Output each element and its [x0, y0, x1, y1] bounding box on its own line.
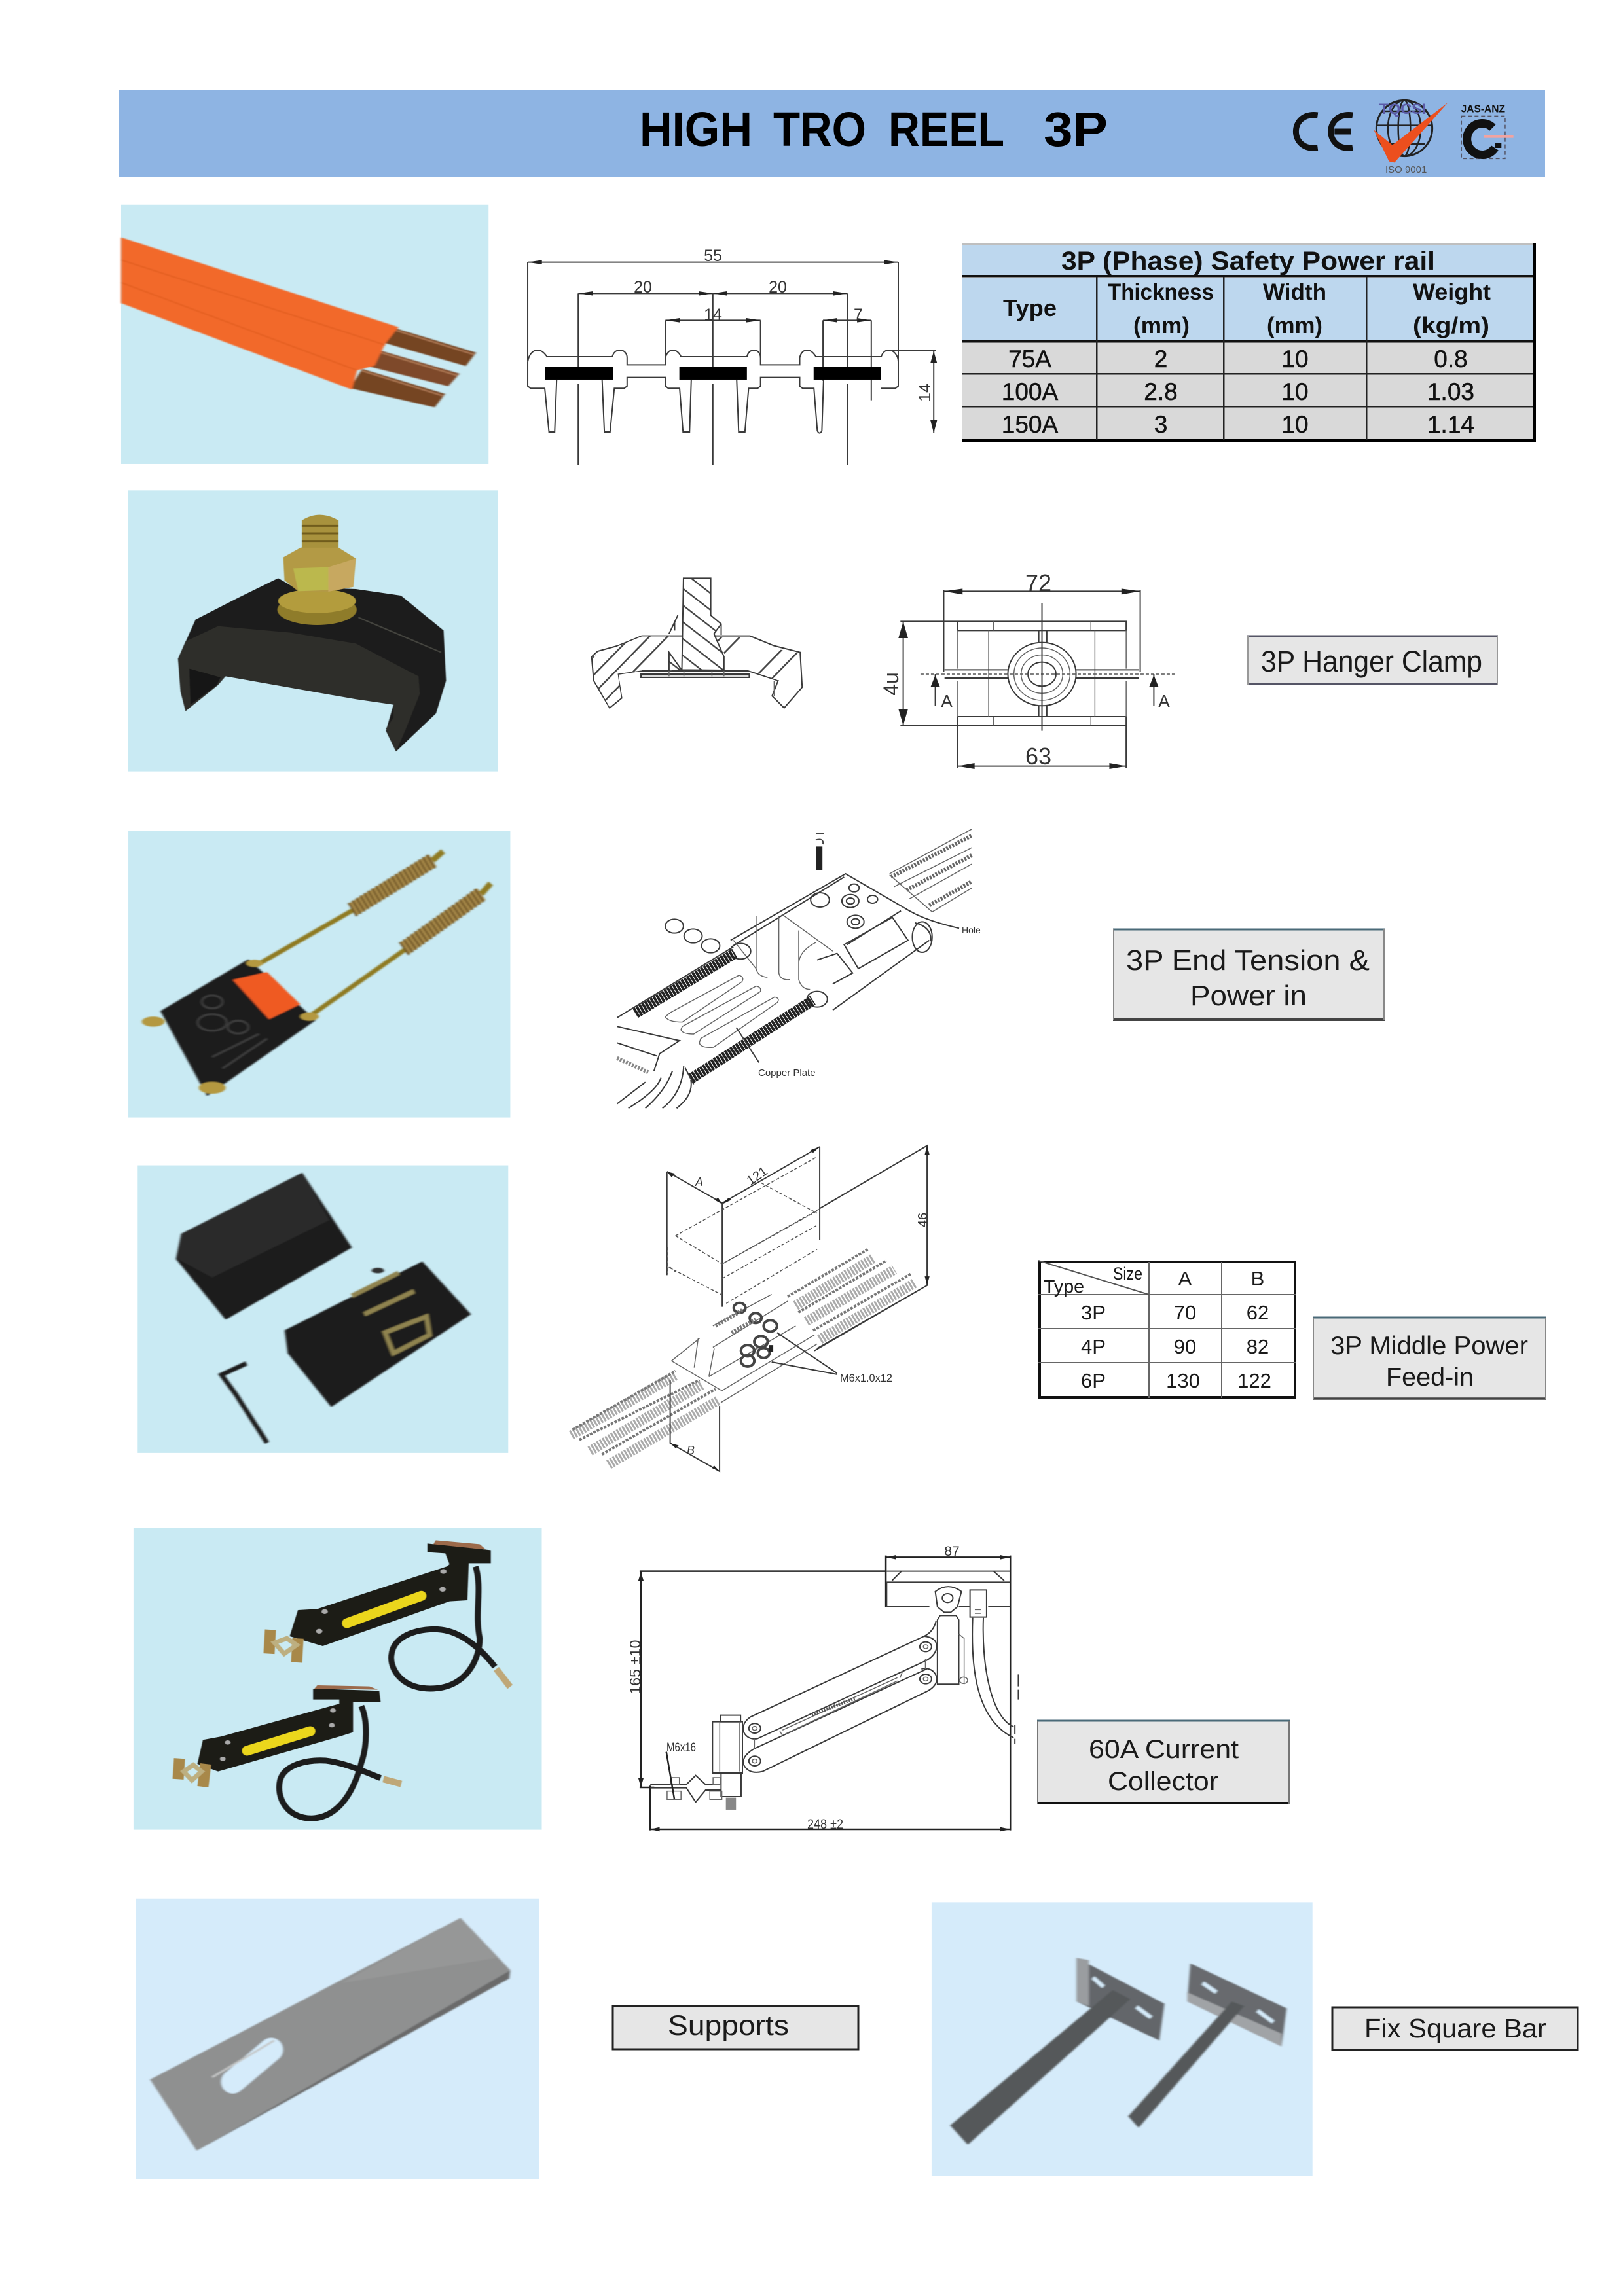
title: HIGH [640, 102, 752, 156]
table: 3P safety power rail: Type [1003, 295, 1057, 321]
panel: middle feed-in photo [137, 1166, 508, 1453]
icon: certification marks: TQCSI [1379, 101, 1426, 117]
diagram: rail cross-section: 14 [704, 306, 722, 324]
upper collector [269, 1540, 510, 1689]
bar two [1187, 1964, 1286, 2047]
body [160, 959, 316, 1096]
slot [233, 2050, 271, 2082]
panel: hanger clamp photo [128, 490, 498, 772]
label: Fix Square Bar: Fix Square Bar [1364, 2013, 1546, 2043]
table: size table: 62 [1247, 1301, 1269, 1324]
table: 3P safety power rail [962, 243, 1536, 442]
label: 3P End Tension & Power in: Power in [1190, 980, 1307, 1012]
table: 3P safety power rail: 10 [1281, 346, 1309, 372]
diagram: rail cross-section: 20 [769, 278, 787, 296]
diagram: hanger clamp plan view: 72 [1025, 569, 1051, 596]
diagram: middle feed-in assembly: A [695, 1175, 703, 1189]
table: 3P safety power rail: 150A [1002, 411, 1059, 438]
table: 3P safety power rail: (kg/m) [1413, 313, 1489, 338]
title: REEL [888, 102, 1004, 156]
bar one [1076, 1958, 1165, 2041]
table: 3P safety power rail: 10 [1281, 378, 1309, 405]
table: size table [1038, 1261, 1296, 1398]
diagram: rail cross-section: 14 [916, 384, 934, 402]
table: 3P safety power rail: 0.8 [1434, 346, 1468, 372]
table: 3P safety power rail: Weight [1413, 279, 1491, 305]
diagram: rail cross-section: 20 [634, 278, 652, 296]
table: 3P safety power rail: 2 [1154, 346, 1167, 372]
table: size table: Type [1044, 1276, 1084, 1297]
icon: certification marks: JAS-ANZ [1461, 104, 1505, 115]
panel: supports photo [136, 1899, 539, 2179]
clamp body [178, 578, 446, 751]
diagram: end tension assembly [617, 829, 981, 1108]
diagram: middle feed-in assembly: B [687, 1444, 695, 1457]
table: 3P safety power rail: 1.03 [1427, 378, 1474, 405]
table: 3P safety power rail: Thickness [1108, 279, 1214, 305]
table: size table: 122 [1237, 1369, 1271, 1392]
label: 3P Middle Power Feed-in: Feed-in [1386, 1363, 1474, 1391]
icon: certification marks: ISO 9001 [1385, 165, 1427, 175]
diagram: hanger clamp section [592, 578, 802, 708]
table: size table: 3P [1081, 1301, 1106, 1324]
label: Supports [613, 2006, 858, 2049]
label: 60A Current Collector [1037, 1721, 1290, 1804]
title: TRO [773, 102, 866, 156]
diagram: hanger clamp plan view: 4u [879, 672, 903, 696]
table: size table: A [1178, 1267, 1192, 1290]
diagram: middle feed-in assembly [572, 1145, 930, 1471]
label: Supports: Supports [668, 2010, 789, 2041]
diagram: current collector drawing [627, 1544, 1018, 1832]
title: 3P [1044, 102, 1108, 156]
diagram: current collector drawing: 87 [944, 1544, 960, 1559]
table: 3P safety power rail: 3 [1154, 411, 1167, 438]
orange rail [121, 238, 399, 389]
panel: fix square bar photo [932, 1902, 1313, 2176]
table: 3P safety power rail: 75A [1008, 346, 1051, 372]
label: 3P Hanger Clamp: 3P Hanger Clamp [1261, 645, 1482, 678]
table: 3P safety power rail: 3P (Phase) Safety Power rail [1061, 247, 1435, 276]
rods and springs [257, 908, 406, 1016]
title banner [119, 90, 1545, 177]
diagram: hanger clamp plan view [879, 569, 1175, 770]
label: 60A Current Collector: 60A Current [1089, 1735, 1239, 1764]
label: 3P Hanger Clamp [1247, 636, 1498, 685]
diagram: hanger clamp plan view: 63 [1025, 743, 1051, 770]
bolt [302, 515, 338, 552]
table: size table: 6P [1081, 1369, 1106, 1392]
cover [176, 1173, 352, 1319]
table: 3P safety power rail: 1.14 [1427, 411, 1474, 438]
table: size table: Size [1113, 1264, 1142, 1283]
table: 3P safety power rail: 100A [1002, 378, 1059, 405]
copper conductors [350, 329, 476, 407]
allen key [221, 1363, 267, 1443]
label: 3P End Tension & Power in: 3P End Tension & [1126, 944, 1370, 977]
table: 3P safety power rail: (mm) [1133, 313, 1190, 338]
label: 3P End Tension & Power in [1113, 929, 1385, 1020]
table: size table: 90 [1174, 1335, 1196, 1358]
diagram: hanger clamp plan view: A [941, 691, 953, 711]
table: size table: B [1251, 1267, 1264, 1290]
base [285, 1261, 471, 1407]
table: 3P safety power rail: 2.8 [1144, 378, 1178, 405]
table: size table: 4P [1081, 1335, 1106, 1358]
diagram: end tension assembly: Hole [962, 925, 981, 935]
diagram: middle feed-in assembly: 46 [916, 1213, 930, 1227]
label: 3P Middle Power Feed-in: 3P Middle Power [1330, 1332, 1528, 1360]
diagram: end tension assembly: Copper Plate [758, 1067, 816, 1079]
support plate [150, 1918, 510, 2151]
table: size table: 130 [1166, 1369, 1200, 1392]
lower collector [178, 1685, 401, 1818]
diagram: current collector drawing: 165 ±10 [627, 1640, 644, 1694]
diagram: rail cross-section [528, 247, 937, 465]
title [640, 102, 1108, 156]
diagram: middle feed-in assembly: M6x1.0x12 [840, 1372, 892, 1384]
diagram: current collector drawing: M6x16 [666, 1741, 696, 1755]
panel: power rail photo [121, 205, 488, 464]
table: size table: 70 [1174, 1301, 1196, 1324]
panel: current collector photo [134, 1528, 542, 1830]
table: 3P safety power rail: (mm) [1267, 313, 1322, 338]
icon: certification marks [1296, 100, 1514, 175]
table: size table: 82 [1247, 1335, 1269, 1358]
diagram: hanger clamp plan view: A [1158, 691, 1170, 711]
diagram: current collector drawing: 248 ±2 [807, 1817, 843, 1832]
diagram: rail cross-section: 7 [854, 306, 863, 324]
label: Fix Square Bar [1332, 2007, 1578, 2050]
diagram: rail cross-section: 55 [704, 247, 722, 265]
label: 60A Current Collector: Collector [1108, 1767, 1218, 1796]
panel: end tension photo [128, 831, 510, 1118]
label: 3P Middle Power Feed-in [1313, 1318, 1546, 1399]
table: 3P safety power rail: Width [1263, 279, 1326, 305]
diagram: middle feed-in assembly: 121 [744, 1164, 771, 1189]
table: 3P safety power rail: 10 [1281, 411, 1309, 438]
